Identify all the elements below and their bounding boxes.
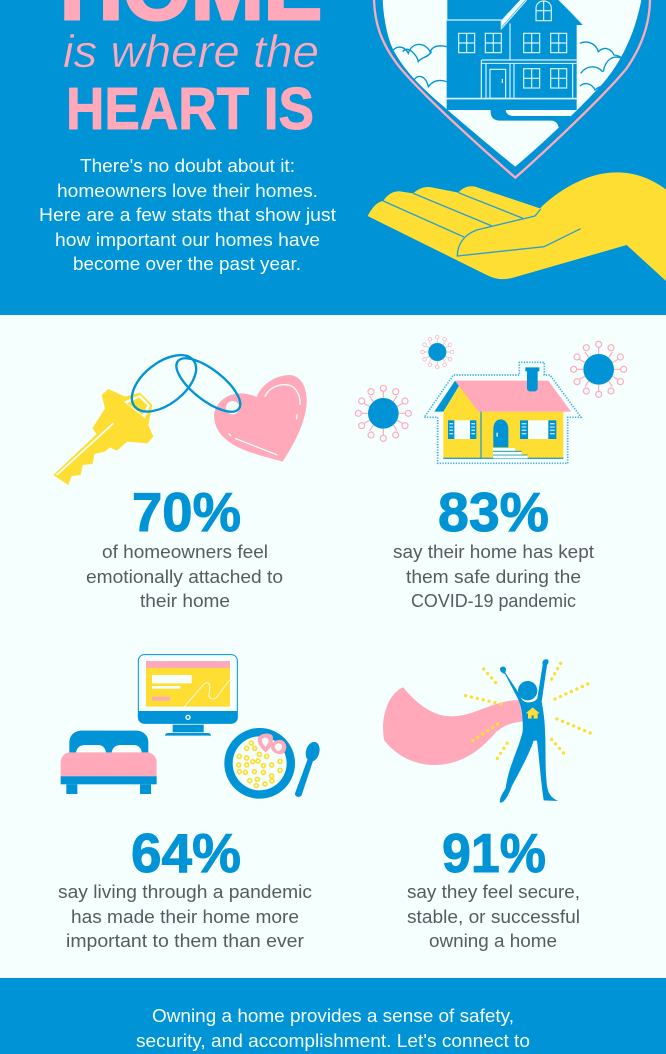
stat 83%: them safe during the — [406, 567, 581, 587]
monitor — [138, 655, 237, 736]
stat 91% — [407, 822, 580, 951]
title: is where the — [63, 26, 319, 77]
intro text block: There's no doubt about it: — [80, 156, 295, 176]
title: HEART IS — [66, 76, 314, 142]
stat 83% — [393, 481, 594, 611]
stat 70%: their home — [140, 591, 230, 611]
house — [447, 0, 522, 20]
bed — [61, 731, 157, 794]
stat 64%: say living through a pandemic — [58, 882, 312, 902]
intro text block: Here are a few stats that show just — [39, 205, 336, 225]
icon: house and viruses — [355, 335, 627, 463]
stat 64%: 64% — [131, 822, 241, 884]
stat 70%: of homeowners feel — [102, 542, 268, 562]
icon: caped hero — [383, 659, 591, 803]
intro text block — [39, 156, 336, 274]
stat 83%: say their home has kept — [393, 542, 594, 562]
footer panel — [0, 978, 666, 1054]
icon: heart with house — [374, 0, 650, 178]
intro text block: homeowners love their homes. — [57, 181, 318, 201]
stat 70% — [86, 481, 283, 611]
cereal bowl — [224, 728, 322, 799]
footer panel: Owning a home provides a sense of safety, — [152, 1006, 514, 1026]
stat 91%: stable, or successful — [407, 907, 580, 927]
stat 91%: owning a home — [429, 931, 557, 951]
stat 64%: important to them than ever — [66, 931, 304, 951]
stat 70%: 70% — [132, 481, 241, 543]
stat 91%: 91% — [442, 822, 546, 884]
icon: key and heart keyring — [53, 344, 307, 485]
title — [60, 0, 322, 142]
stat 83%: COVID-19 pandemic — [411, 591, 576, 611]
intro text block: become over the past year. — [73, 254, 301, 274]
stat 70%: emotionally attached to — [86, 567, 283, 587]
intro text block: how important our homes have — [55, 230, 320, 250]
stat 83%: 83% — [438, 481, 549, 543]
stat 91%: say they feel secure, — [407, 882, 580, 902]
footer panel: security, and accomplishment. Let's connect to — [136, 1031, 530, 1051]
icon: open yellow hand — [368, 172, 666, 282]
main light panel — [0, 315, 666, 978]
icon: clouds — [393, 42, 625, 90]
icon: bed, monitor and cereal bowl — [61, 655, 322, 799]
stat 64% — [58, 822, 312, 951]
stat 64%: has made their home more — [71, 907, 299, 927]
header background panel — [0, 0, 666, 315]
